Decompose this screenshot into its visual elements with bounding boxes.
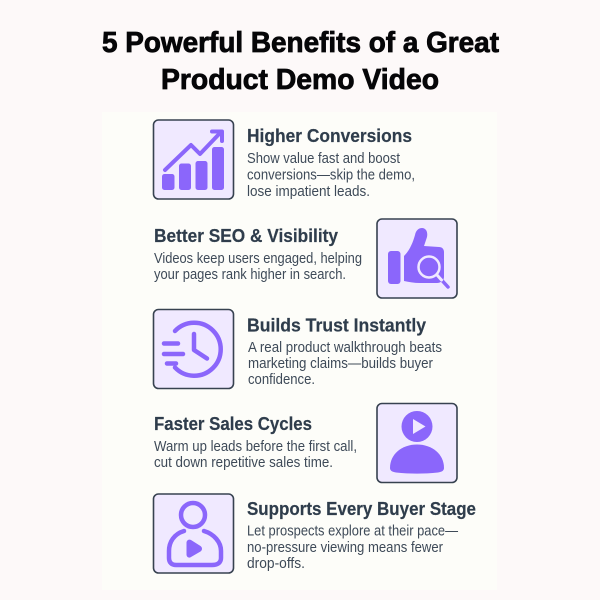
icon: presenter with play button — [377, 404, 457, 482]
benefit: builds trust — [154, 310, 442, 388]
text block — [247, 524, 458, 572]
title: 5 Powerful Benefits of a Great — [102, 27, 499, 59]
text block: Show value fast and boost — [247, 151, 400, 167]
icon: bar chart with arrow — [154, 120, 234, 199]
benefit: supports every buyer stage — [154, 494, 476, 573]
text block: drop-offs. — [247, 556, 305, 572]
text block: confidence. — [248, 372, 315, 388]
text block — [248, 340, 442, 388]
text block — [154, 439, 357, 471]
text block — [154, 251, 362, 283]
icon: person with play symbol — [154, 494, 234, 573]
heading: Higher Conversions — [247, 125, 412, 146]
text block — [247, 151, 415, 200]
title — [102, 27, 499, 96]
text block: conversions—skip the demo, — [247, 168, 415, 184]
text block: your pages rank higher in search. — [154, 267, 346, 283]
title: Product Demo Video — [161, 64, 439, 96]
heading: Builds Trust Instantly — [247, 314, 427, 336]
panel: benefits card — [102, 112, 497, 590]
text block: Videos keep users engaged, helping — [154, 251, 362, 267]
benefit: higher conversions — [154, 120, 415, 200]
benefit: faster sales cycles — [154, 404, 457, 482]
icon: fast clock — [154, 310, 234, 388]
text block: Warm up leads before the first call, — [154, 439, 357, 455]
text block: Let prospects explore at their pace— — [247, 524, 458, 540]
text block: no-pressure viewing means fewer — [247, 540, 443, 556]
text block: marketing claims—builds buyer — [248, 356, 433, 372]
text block: A real product walkthrough beats — [248, 340, 442, 356]
text block: cut down repetitive sales time. — [154, 455, 333, 471]
heading: Faster Sales Cycles — [154, 413, 312, 434]
heading: Better SEO & Visibility — [154, 225, 339, 246]
icon: thumbs up with magnifier — [377, 219, 457, 298]
benefit: better SEO — [154, 219, 457, 298]
heading: Supports Every Buyer Stage — [247, 498, 476, 519]
text block: lose impatient leads. — [247, 184, 370, 200]
